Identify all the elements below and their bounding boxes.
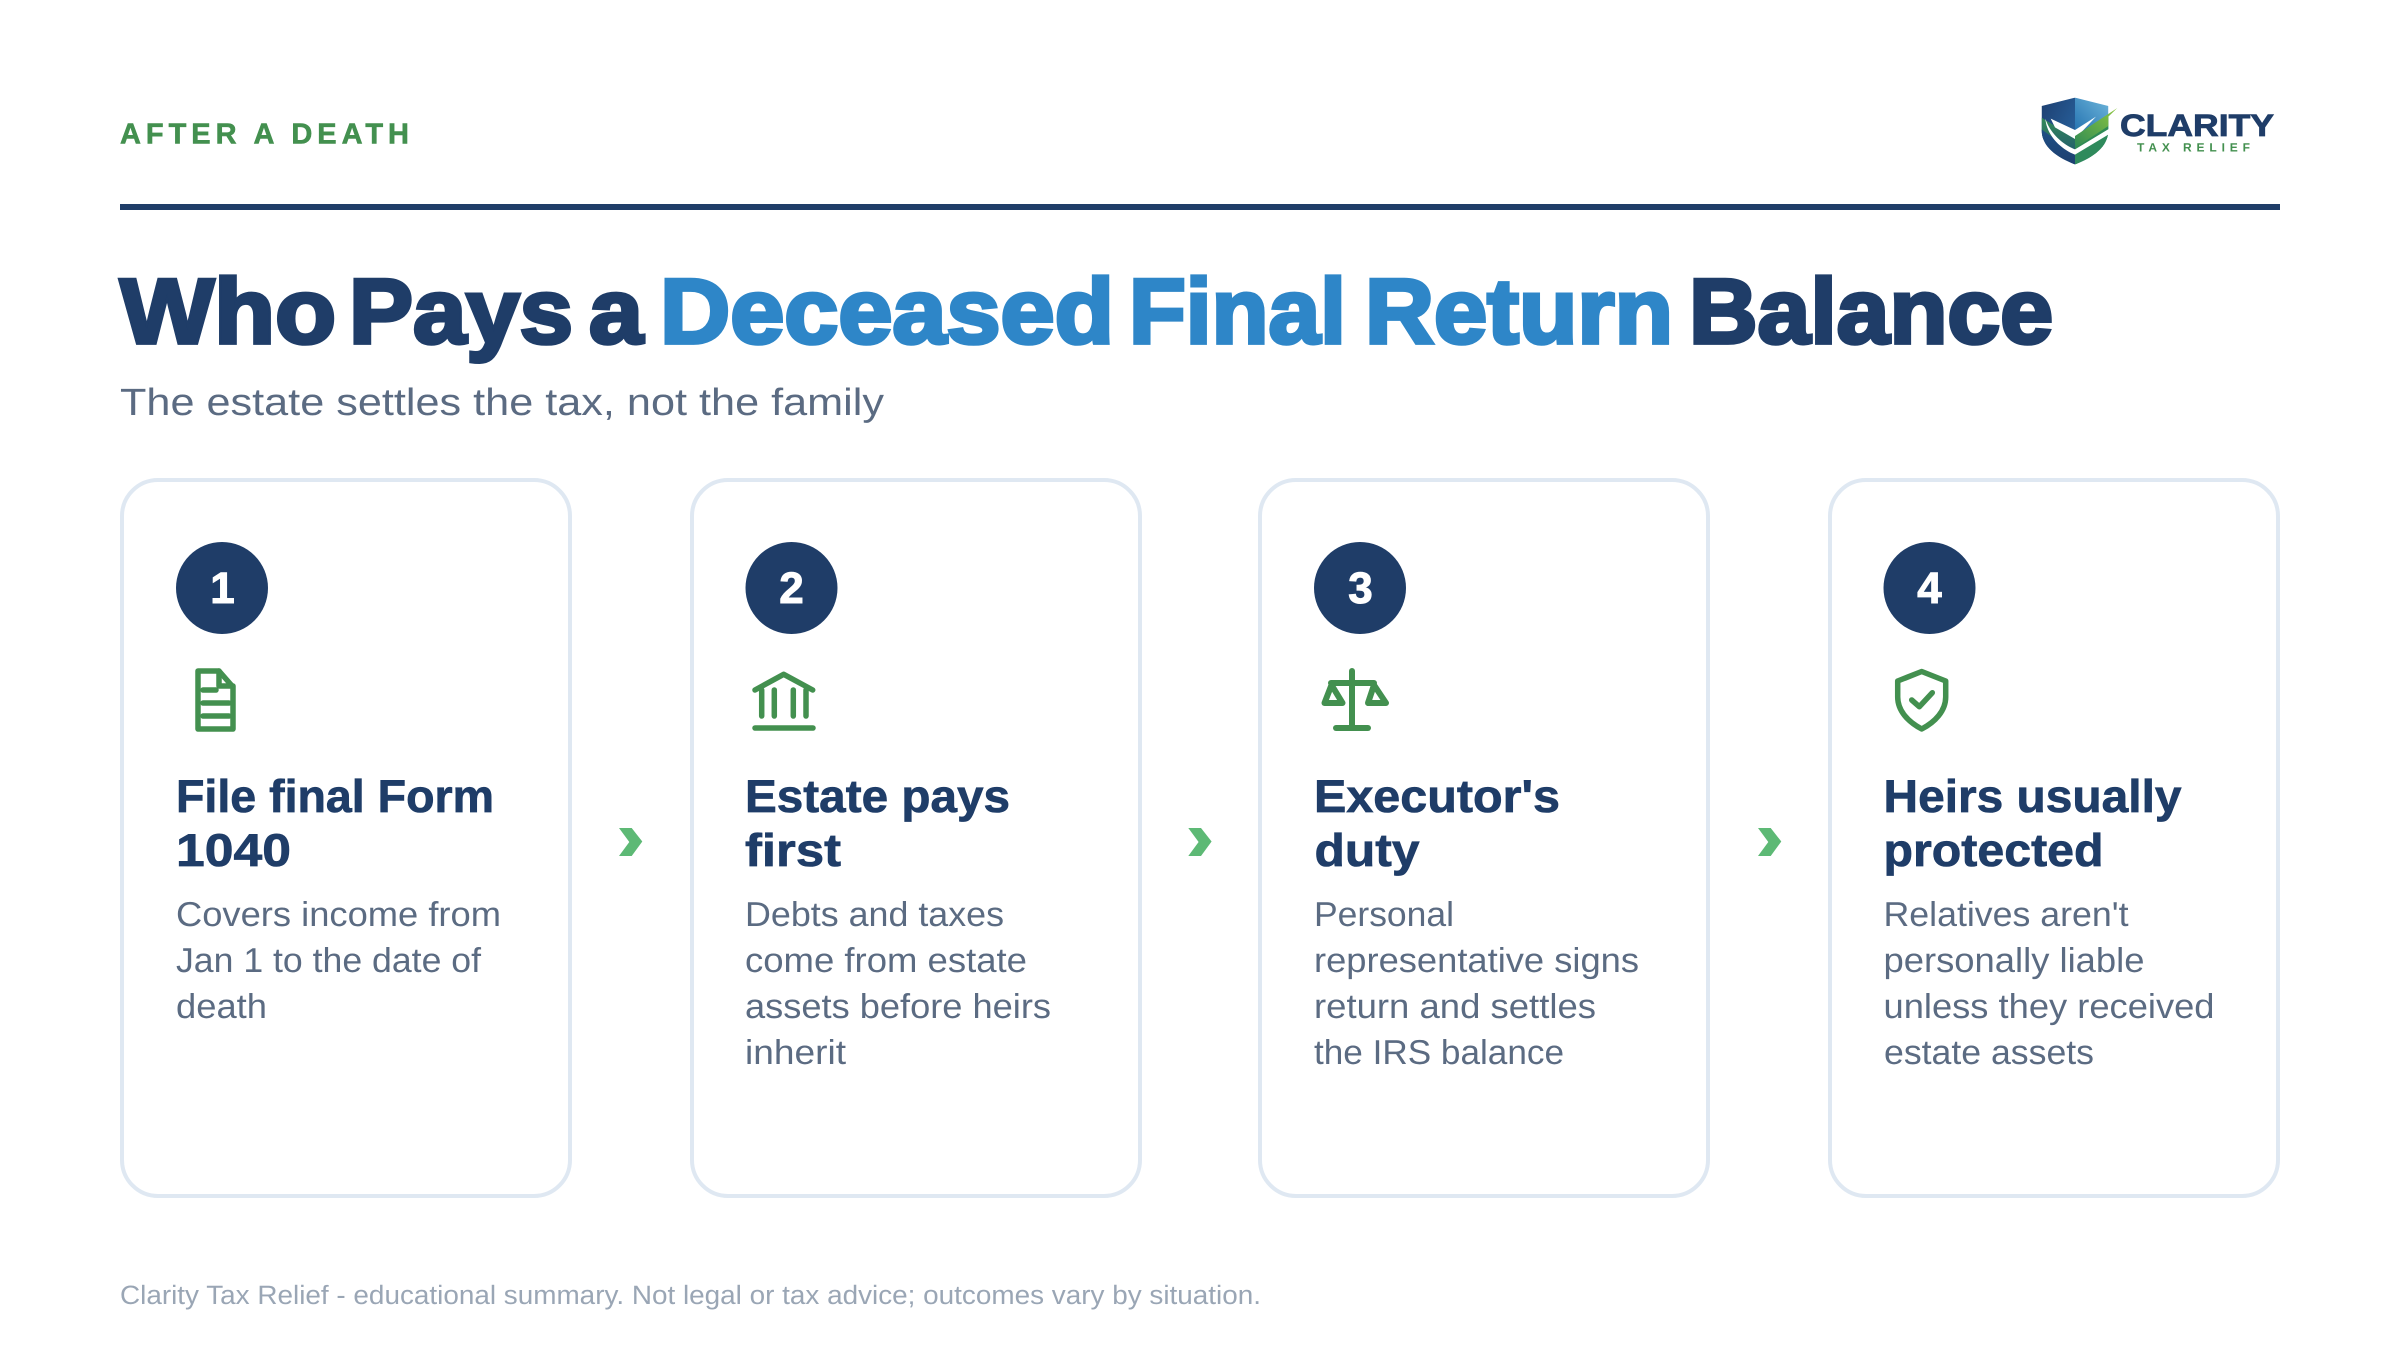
title: Balance [1689,261,2053,363]
description [1884,896,2214,1072]
card 1: File final Form 1040 [122,480,570,1196]
description: inherit [745,1034,846,1072]
icon: shield with check [1898,672,1946,729]
card 2: Estate pays first [692,480,1140,1196]
step number 4 [1884,542,1976,634]
step number 3 [1314,542,1406,634]
logo shield mark [2040,97,2117,167]
description: come from estate [745,942,1027,980]
title: Pays [349,261,573,363]
title [120,261,2053,363]
subtitle: The estate settles the tax, not the family [120,382,884,424]
step number 3: 3 [1348,564,1373,613]
arrow 3 [1758,828,1781,856]
card 4: Heirs usually protected [1830,480,2278,1196]
title: Final [1129,261,1346,363]
logo tagline: TAX RELIEF [2137,140,2250,154]
description: Covers income from [176,896,501,934]
description: return and settles [1314,988,1596,1026]
icon: scales [1324,671,1386,728]
description: representative signs [1314,942,1639,980]
heading [745,770,1010,876]
description: Relatives aren't [1884,896,2129,934]
description: personally liable [1884,942,2144,980]
heading: Heirs usually [1884,770,2182,822]
heading [1314,770,1560,876]
description [745,896,1051,1072]
arrow 2 [1188,828,1212,856]
title: Who [120,261,336,363]
description: estate assets [1884,1034,2094,1072]
heading: protected [1884,824,2104,876]
heading: File final Form [176,770,494,822]
step number 1 [176,542,268,634]
heading: 1040 [176,824,291,876]
logo wordmark: CLARITY [2120,108,2274,143]
heading [176,770,494,876]
heading: Estate pays [745,770,1010,822]
arrow 1 [619,828,642,856]
footer disclaimer: Clarity Tax Relief - educational summary. Not legal or tax advice; outcomes vary by situation. [120,1280,1261,1310]
card 3: Executor's duty [1260,480,1708,1196]
description: Jan 1 to the date of [176,942,481,980]
step number 1: 1 [210,564,235,613]
logo: Clarity Tax Relief [2040,97,2274,167]
description: Personal [1314,896,1454,934]
title: a [589,261,644,363]
description: the IRS balance [1314,1034,1564,1072]
heading: duty [1314,824,1420,876]
header rule [120,204,2280,210]
title: Deceased [660,261,1114,363]
description: assets before heirs [745,988,1051,1026]
description: unless they received [1884,988,2214,1026]
description [176,896,501,1026]
step number 2 [746,542,838,634]
heading: Executor's [1314,770,1560,822]
heading: first [745,824,841,876]
icon: document [198,671,233,729]
description [1314,896,1639,1072]
step number 2: 2 [779,564,804,613]
description: Debts and taxes [745,896,1004,934]
icon: bank building [755,674,813,728]
step number 4: 4 [1917,564,1942,613]
title: Return [1365,261,1673,363]
heading [1884,770,2182,876]
description: death [176,988,267,1026]
eyebrow label: AFTER A DEATH [120,118,409,150]
